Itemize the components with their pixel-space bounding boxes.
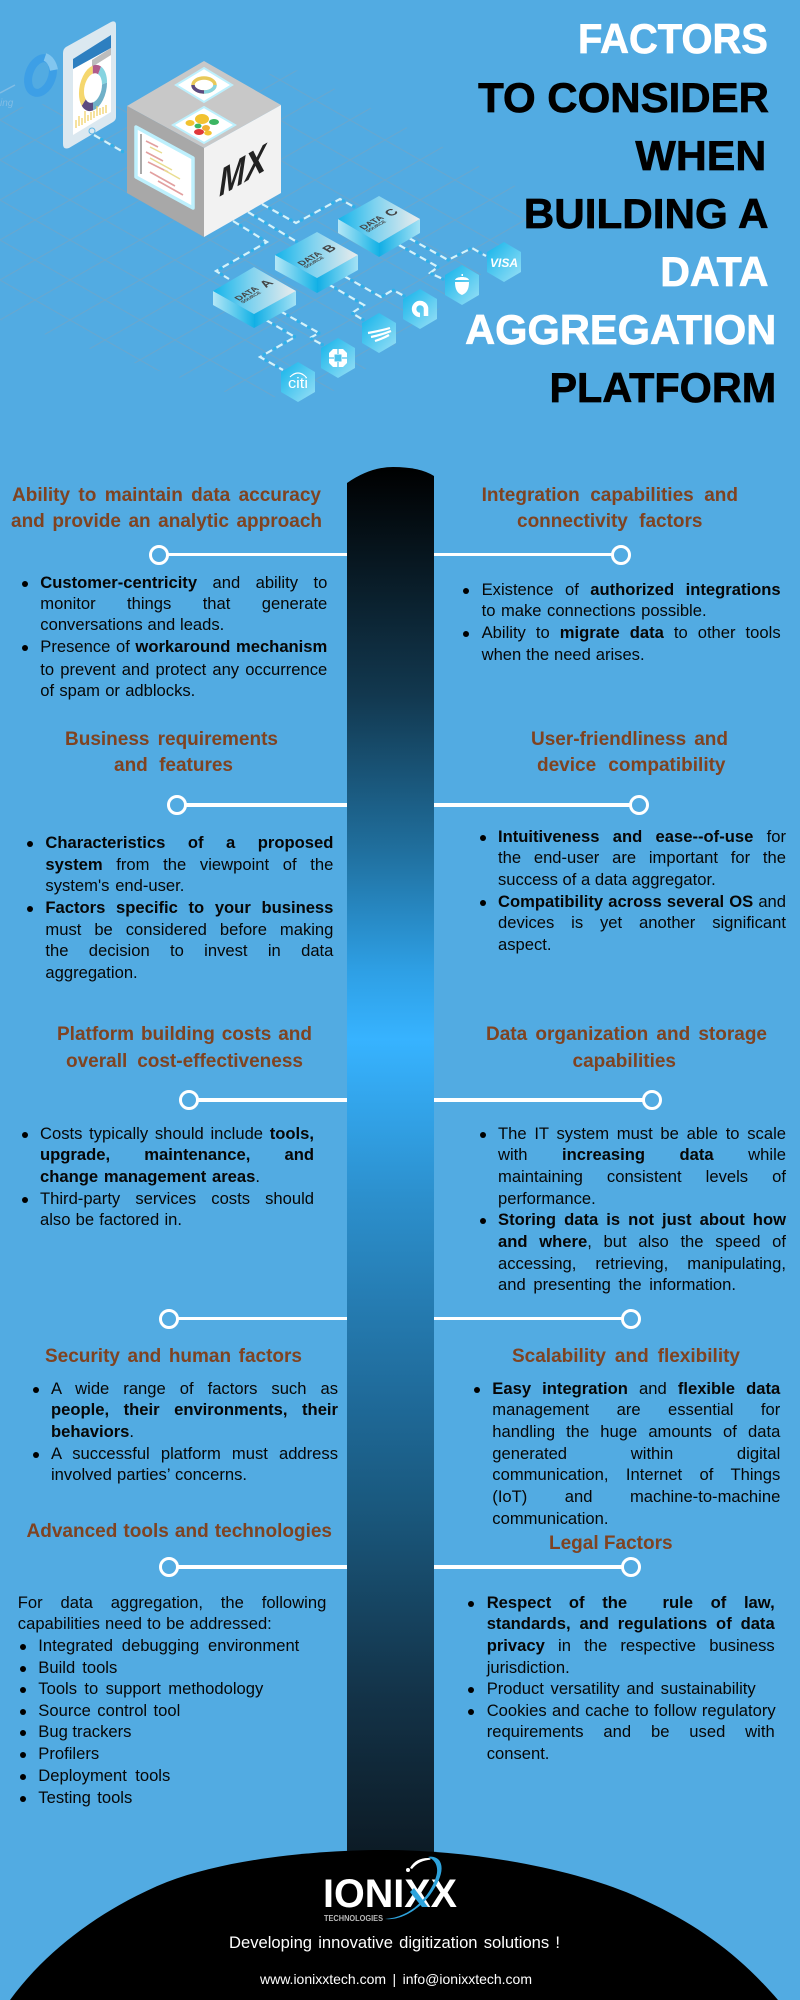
heading: Integration capabilities and: [482, 485, 738, 506]
text block: standards, and regulations of data: [487, 1614, 775, 1633]
node: [621, 1557, 641, 1577]
heading: User-friendliness and: [531, 729, 728, 750]
text block: Storing data is not just about how: [498, 1210, 786, 1229]
text block: devices is yet another significant: [498, 913, 786, 932]
text block: Existence of authorized integrations: [482, 580, 781, 599]
text block: jurisdiction.: [487, 1658, 570, 1677]
text block: Tools to support methodology: [38, 1679, 263, 1698]
text block: Testing tools: [38, 1788, 132, 1807]
node: [149, 545, 169, 565]
connector: [169, 1565, 347, 1568]
icon: phone: [63, 21, 116, 148]
text block: behaviors.: [51, 1422, 134, 1441]
panel: footer: [229, 1856, 560, 1987]
panel: user-friendliness: device compatibility: [537, 755, 726, 776]
text block: when the need arises.: [482, 645, 645, 664]
text block: For data aggregation, the following: [18, 1593, 326, 1612]
title: [465, 15, 776, 410]
text block: handling the huge amounts of data: [492, 1422, 780, 1441]
data source B block: B: [319, 242, 340, 254]
data source B block: [275, 232, 358, 293]
text block: also be factored in.: [40, 1210, 182, 1229]
text block: the decision to invest in data: [45, 941, 333, 960]
text block: upgrade, maintenance, and: [40, 1145, 314, 1164]
text block: the end-user are important for the: [498, 848, 786, 867]
text block: management are essential for: [492, 1400, 780, 1419]
icon: chase hexagon: [321, 338, 355, 378]
tagline: Developing innovative digitization solutions !: [229, 1933, 560, 1952]
text block: Characteristics of a proposed: [45, 833, 333, 852]
panel: advanced tools: [18, 1521, 347, 1807]
data source C block: [338, 196, 420, 257]
text block: with increasing data while: [498, 1145, 786, 1164]
text block: consent.: [487, 1744, 549, 1763]
text block: aggregation.: [45, 963, 138, 982]
text block: Integrated debugging environment: [38, 1636, 299, 1655]
panel: data accuracy: [11, 485, 347, 700]
text block: Build tools: [38, 1658, 117, 1677]
data source A block: SOURCE: [240, 291, 264, 304]
text block: Source control tool: [38, 1701, 180, 1720]
node: [159, 1557, 179, 1577]
text block: privacy in the respective business: [487, 1636, 775, 1655]
icon: letter a hexagon: [403, 289, 437, 329]
panel: building costs: [22, 1024, 347, 1229]
text block: Costs typically should include tools,: [40, 1124, 314, 1143]
text block: must be considered before making: [45, 920, 333, 939]
node: [629, 795, 649, 815]
data source C block: SOURCE: [365, 220, 389, 233]
panel: building costs: overall cost-effectiveness: [66, 1051, 303, 1072]
text block: [468, 1593, 776, 1763]
connector: [434, 1098, 652, 1102]
text block: A wide range of factors such as: [51, 1379, 338, 1398]
icon: visa hexagon: VISA: [490, 256, 518, 270]
title: DATA: [660, 248, 768, 294]
logo: Ionixx: IONIXX: [323, 1872, 457, 1916]
panel: business requirements: and features: [114, 755, 233, 776]
text block: [18, 1593, 326, 1807]
logo: Ionixx: TECHNOLOGIES: [324, 1913, 383, 1923]
text block: [22, 1124, 314, 1229]
text block: (IoT) and machine-to-machine: [492, 1487, 780, 1506]
icon: citi hexagon: [281, 362, 315, 402]
node: [179, 1090, 199, 1110]
panel: data accuracy: and provide an analytic approach: [11, 510, 322, 532]
text block: [27, 833, 334, 982]
heading: Business requirements: [65, 729, 278, 750]
title: FACTORS: [578, 15, 768, 62]
contact line: www.ionixxtech.com | info@ionixxtech.com: [260, 1971, 532, 1987]
panel: data organization: [434, 1024, 786, 1294]
text block: involved parties’ concerns.: [51, 1465, 247, 1484]
connector: [434, 1317, 631, 1320]
logo: Ionixx: [323, 1856, 457, 1923]
text block: Factors specific to your business: [45, 898, 333, 917]
icon: faded ring: [0, 55, 57, 109]
text block: communication.: [492, 1509, 609, 1528]
text block: [33, 1379, 338, 1484]
text block: [22, 573, 327, 700]
icon: visa hexagon: [487, 242, 521, 282]
connector: [177, 803, 347, 807]
text block: and presenting the information.: [498, 1275, 736, 1294]
text block: Intuitiveness and ease--of-use for: [498, 827, 786, 846]
title: BUILDING A: [523, 190, 768, 236]
panel: scalability and flexibility: [434, 1309, 780, 1528]
heading: Security and human factors: [45, 1346, 302, 1367]
text block: of spam or adblocks.: [40, 681, 195, 700]
data source A block: [213, 267, 296, 328]
data source C block: DATA: [357, 214, 387, 231]
text block: capabilities need to be addressed:: [18, 1614, 272, 1633]
text block: change management areas.: [40, 1167, 260, 1186]
connector: [159, 553, 347, 556]
data source B block: DATA: [295, 250, 325, 267]
title: AGGREGATION: [465, 306, 776, 352]
title: TO CONSIDER: [478, 74, 769, 120]
text block: The IT system must be able to scale: [498, 1124, 786, 1143]
icon: bank hexagon: [362, 313, 396, 353]
text block: [480, 1124, 786, 1294]
text block: people, their environments, their: [51, 1400, 338, 1419]
text block: and where, but also the speed of: [498, 1232, 786, 1251]
panel: business requirements: [27, 729, 347, 982]
data source A block: DATA: [232, 285, 262, 302]
text block: [480, 827, 786, 954]
text block: Customer-centricity and ability to: [40, 573, 327, 592]
text block: Product versatility and sustainability: [487, 1679, 756, 1698]
text block: Profilers: [38, 1744, 99, 1763]
panel: integration capabilities: connectivity factors: [517, 510, 702, 532]
data source A block: A: [256, 277, 277, 289]
text block: Respect of the rule of law,: [487, 1593, 775, 1612]
connector: [169, 1317, 347, 1320]
text block: conversations and leads.: [40, 615, 224, 634]
text block: success of a data aggregator.: [498, 870, 716, 889]
text block: [474, 1379, 780, 1528]
node: [642, 1090, 662, 1110]
icon: acorn hexagon: [445, 265, 479, 305]
text block: monitor things that generate: [40, 594, 327, 613]
heading: Scalability and flexibility: [512, 1346, 740, 1367]
icon: MX cube: MX: [219, 134, 268, 206]
connectors: dashed data links: [94, 135, 486, 370]
heading: Ability to maintain data accuracy: [12, 485, 321, 506]
text block: maintaining consistent levels of: [498, 1167, 786, 1186]
text block: Easy integration and flexible data: [492, 1379, 780, 1398]
node: [159, 1309, 179, 1329]
data source C block: C: [381, 206, 402, 218]
text block: performance.: [498, 1189, 596, 1208]
connector: [434, 1565, 631, 1568]
node: [167, 795, 187, 815]
panel: legal factors: [434, 1533, 776, 1763]
panel: integration capabilities: [434, 485, 781, 664]
text block: to make connections possible.: [482, 601, 707, 620]
text block: generated within digital: [492, 1444, 780, 1463]
text block: accessing, retrieving, manipulating,: [498, 1254, 786, 1273]
text block: Cookies and cache to follow regulatory: [487, 1701, 776, 1720]
text block: requirements and be used with: [487, 1722, 775, 1741]
connector: [434, 803, 639, 807]
title: WHEN: [635, 132, 766, 178]
heading: Platform building costs and: [57, 1024, 312, 1045]
text block: [463, 580, 781, 664]
text block: Deployment tools: [38, 1766, 170, 1785]
text block: Bug trackers: [38, 1722, 131, 1741]
panel: data organization: capabilities: [572, 1051, 676, 1072]
panel: user-friendliness: [434, 729, 786, 954]
heading: Legal Factors: [549, 1533, 673, 1554]
text block: Compatibility across several OS and: [498, 892, 786, 911]
icon: citi hexagon: citi: [288, 375, 308, 392]
heading: Data organization and storage: [486, 1024, 767, 1045]
panel: security and human factors: [33, 1309, 347, 1484]
icon: faded ring: ing: [0, 98, 14, 109]
node: [611, 545, 631, 565]
text block: system's end-user.: [45, 876, 184, 895]
connector: [434, 553, 621, 556]
title: PLATFORM: [549, 364, 776, 410]
text block: to prevent and protect any occurrence: [40, 660, 327, 679]
illustration: data aggregation isometric diagram: [0, 21, 521, 402]
node: [621, 1309, 641, 1329]
connector: [189, 1098, 347, 1102]
text block: system from the viewpoint of the: [45, 855, 333, 874]
text block: communication, Internet of Things: [492, 1465, 780, 1484]
heading: Advanced tools and technologies: [26, 1521, 332, 1542]
text block: Ability to migrate data to other tools: [482, 623, 781, 642]
data source B block: SOURCE: [303, 256, 327, 269]
icon: MX cube: [127, 61, 281, 237]
text block: aspect.: [498, 935, 552, 954]
text block: Presence of workaround mechanism: [40, 637, 327, 656]
text block: A successful platform must address: [51, 1444, 338, 1463]
text block: Third-party services costs should: [40, 1189, 314, 1208]
